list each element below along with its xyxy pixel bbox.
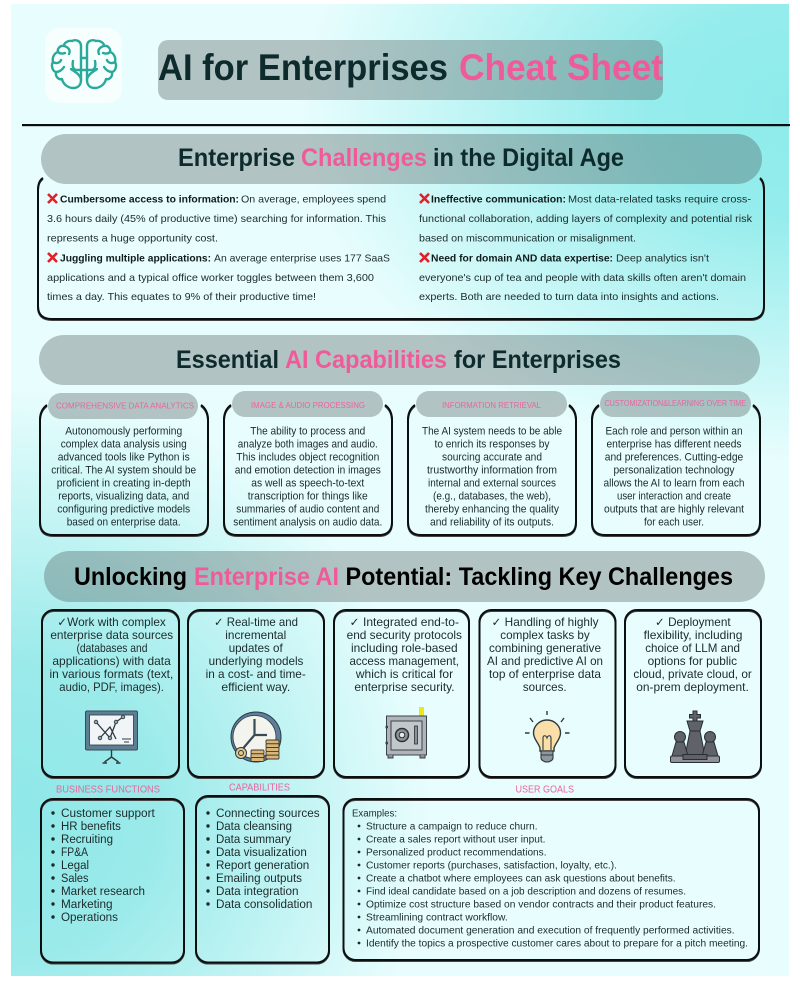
card: deployment flexibility: cloud, private cloud, or — [633, 668, 752, 681]
card: complex data sources: applications) with data — [52, 655, 171, 668]
card: complex tasks: AI and predictive AI on — [487, 655, 603, 668]
card: complex data sources: enterprise data sources — [50, 629, 173, 642]
panel: user goals: Structure a campaign to reduce churn. — [366, 822, 538, 832]
heading: essential AI capabilities: AI Capabilities — [285, 346, 447, 374]
card: real-time updates: incremental — [225, 629, 286, 642]
heading: enterprise challenges: in the Digital Age — [433, 144, 624, 172]
title: AI for Enterprises — [158, 47, 448, 88]
label: user goals: USER GOALS — [516, 784, 574, 796]
card: customization and learning over time: CUSTOMIZATION&LEARNING OVER TIME — [604, 398, 746, 408]
icon: presentation board — [86, 711, 138, 763]
text block: access and applications: times a day. This equates to 9% of their productive time! — [47, 292, 316, 303]
card: information retrieval: (e.g., databases, the web), — [433, 490, 551, 502]
card: image and audio processing: This includes object recognition — [236, 452, 379, 464]
card: customization and learning over time: personalization technology — [614, 464, 735, 476]
card: security protocols: including role-based — [351, 642, 458, 655]
card: deployment flexibility: on-prem deployment. — [636, 681, 749, 694]
card: image and audio processing: The ability to process and — [250, 426, 365, 438]
card: image and audio processing: as well as speech-to-text — [251, 478, 364, 490]
panel: business functions: HR benefits — [61, 819, 121, 833]
text block: communication and expertise: Deep analytics isn't — [616, 254, 709, 264]
card: complex tasks: top of enterprise data — [489, 668, 602, 681]
card: real-time updates: efficient way. — [221, 681, 290, 694]
panel: user goals: Streamlining contract workflow. — [366, 912, 508, 924]
card: security protocols: enterprise security. — [354, 681, 455, 694]
card: customization and learning over time — [592, 391, 760, 535]
text block: access and applications: 3.6 hours daily (45% of productive time) searching for information. This — [47, 214, 386, 225]
panel: capabilities: Data cleansing — [216, 819, 292, 833]
text block: communication and expertise: Most data-related tasks require cross- — [568, 194, 751, 206]
icon: clock and coins — [231, 712, 281, 762]
panel: user goals: Create a sales report without user input. — [366, 834, 546, 846]
icon: chess pieces — [670, 711, 720, 762]
card: comprehensive data analytics: proficient in creating in-depth — [57, 478, 191, 490]
title — [158, 40, 663, 100]
panel: enterprise challenges — [38, 134, 764, 319]
card: customization and learning over time: Each role and person within an — [606, 426, 742, 438]
card: information retrieval: and reliability of its outputs. — [430, 516, 554, 528]
icon: light bulb — [525, 711, 570, 762]
text block: access and applications: Juggling multiple applications: — [60, 254, 211, 264]
text block: access and applications: An average enterprise uses 177 SaaS — [214, 254, 390, 264]
card: comprehensive data analytics: COMPREHENSIVE DATA ANALYTICS — [56, 400, 194, 410]
card: complex tasks — [480, 610, 616, 777]
card: image and audio processing: summaries of audio content and — [236, 504, 379, 516]
card: complex tasks: complex tasks by — [500, 629, 590, 642]
card: information retrieval: The AI system needs to be able — [422, 426, 562, 438]
title: Cheat Sheet — [459, 47, 663, 88]
heading: essential AI capabilities — [39, 335, 760, 385]
text block: access and applications: Cumbersome access to information: — [60, 194, 239, 206]
card: information retrieval: to enrich its responses by — [434, 438, 550, 450]
card: information retrieval — [408, 391, 576, 535]
panel: user goals: Examples: — [352, 808, 397, 820]
panel: capabilities — [196, 796, 329, 962]
panel: capabilities: Data visualization — [216, 845, 307, 859]
card: customization and learning over time: user interaction and create — [617, 490, 731, 502]
card: real-time updates: ✓ Real-time and — [214, 616, 298, 629]
card: deployment flexibility: options for public — [648, 655, 737, 668]
panel: capabilities: Emailing outputs — [216, 871, 302, 885]
card: deployment flexibility: ✓ Deployment — [655, 616, 731, 629]
card: image and audio processing: transcription for things like — [248, 490, 368, 502]
panel: user goals: Personalized product recommendations. — [366, 848, 546, 858]
card: information retrieval: internal and external sources — [428, 478, 556, 490]
heading: essential AI capabilities: for Enterprises — [454, 346, 621, 374]
card: comprehensive data analytics: based on enterprise data. — [67, 516, 181, 528]
text block: communication and expertise: based on miscommunication or misalignment. — [419, 234, 636, 244]
panel: user goals: Optimize cost structure based on vendor contracts and their product features. — [366, 900, 716, 910]
card: customization and learning over time: enterprise has different needs — [606, 438, 742, 450]
label: business functions: BUSINESS FUNCTIONS — [56, 784, 160, 796]
text block: communication and expertise: Need for domain AND data expertise: — [431, 254, 613, 264]
card: comprehensive data analytics: critical. The AI system should be — [51, 464, 196, 476]
card: comprehensive data analytics: configuring predictive models — [57, 504, 191, 516]
text block: communication and expertise: Ineffective communication: — [431, 194, 566, 206]
card: deployment flexibility — [625, 610, 761, 777]
panel: capabilities: Report generation — [216, 858, 309, 872]
heading: unlocking enterprise AI potential: Enterprise AI — [194, 563, 339, 591]
heading: enterprise challenges: Challenges — [301, 144, 427, 172]
card: image and audio processing — [224, 391, 392, 535]
card: security protocols: access management, — [350, 655, 459, 668]
card: image and audio processing: analyze both images and audio. — [238, 438, 378, 450]
panel: business functions: Recruiting — [61, 832, 113, 846]
icon: brain logo — [45, 28, 122, 103]
card: information retrieval: trustworthy information from — [427, 464, 557, 476]
card: security protocols: ✓ Integrated end-to- — [350, 616, 459, 629]
text block: access and applications — [47, 194, 390, 303]
card: information retrieval: INFORMATION RETRIEVAL — [442, 400, 541, 410]
card: real-time updates: updates of — [229, 642, 283, 655]
heading: unlocking enterprise AI potential: Unlocking — [74, 563, 187, 591]
card: information retrieval: thereby enhancing the quality — [425, 504, 560, 516]
card: complex tasks: ✓ Handling of highly — [492, 616, 599, 629]
card: complex tasks: combining generative — [489, 642, 601, 655]
card: security protocols: end security protocols — [347, 629, 462, 642]
panel: business functions: Customer support — [61, 806, 155, 820]
panel: capabilities: Data summary — [216, 832, 291, 846]
panel: business functions: Sales — [61, 871, 88, 885]
panel: business functions — [41, 799, 184, 962]
panel: business functions: Marketing — [61, 897, 113, 911]
card: real-time updates: in a cost- and time- — [206, 668, 306, 681]
card: information retrieval: sourcing accurate and — [442, 452, 542, 464]
card: image and audio processing: sentiment analysis on audio data. — [233, 516, 382, 528]
card: security protocols — [334, 610, 469, 777]
panel: capabilities: Data consolidation — [216, 897, 312, 911]
card: image and audio processing: IMAGE & AUDIO PROCESSING — [251, 400, 365, 410]
panel: business functions: Operations — [61, 910, 118, 924]
card: complex tasks: sources. — [523, 681, 567, 694]
heading: unlocking enterprise AI potential — [44, 551, 765, 602]
text block: communication and expertise: experts. Both are needed to turn data into insights and actions. — [419, 292, 719, 303]
card: comprehensive data analytics: advanced tools like Python is — [58, 452, 190, 464]
heading: essential AI capabilities: Essential — [176, 346, 279, 374]
text block: communication and expertise: everyone's cup of tea and people with data skills often aren't domain — [419, 273, 746, 284]
text block: communication and expertise: functional collaboration, adding layers of complexity and potential risk — [419, 214, 753, 225]
card: security protocols: which is critical for — [355, 668, 453, 681]
card: customization and learning over time: allows the AI to learn from each — [604, 478, 744, 490]
card: customization and learning over time: outputs that are highly relevant — [604, 504, 744, 516]
card: complex data sources: in various formats (text, — [50, 668, 173, 681]
heading: enterprise challenges — [41, 134, 762, 184]
panel: user goals — [344, 799, 759, 960]
panel: user goals: Find ideal candidate based on a job description and dozens of resumes. — [366, 886, 686, 898]
card: customization and learning over time: for each user. — [644, 516, 704, 528]
card: complex data sources: audio, PDF, images). — [59, 681, 164, 694]
text block: access and applications: On average, employees spend — [241, 194, 386, 206]
panel: business functions: Market research — [61, 884, 145, 898]
heading: unlocking enterprise AI potential: Potential: Tackling Key Challenges — [346, 563, 733, 591]
card: real-time updates: underlying models — [209, 655, 304, 668]
card: deployment flexibility: flexibility, including — [644, 629, 742, 642]
text block: access and applications: applications and a typical office worker toggles between them 3,600 — [47, 273, 374, 284]
icon: safe — [386, 707, 426, 758]
card: customization and learning over time: and preferences. Cutting-edge — [605, 452, 743, 464]
label: capabilities: CAPABILITIES — [229, 782, 290, 794]
panel: user goals: Identify the topics a prospective customer cares about to prepare for a pitch meeting. — [366, 938, 748, 950]
text block: access and applications: represents a huge opportunity cost. — [47, 234, 218, 244]
text block: communication and expertise — [419, 194, 753, 303]
panel: capabilities: Data integration — [216, 884, 299, 898]
panel: user goals: Customer reports (purchases, satisfaction, loyalty, etc.). — [366, 860, 617, 872]
card: comprehensive data analytics: complex data analysis using — [61, 438, 187, 450]
panel: user goals: Automated document generation and execution of frequently performed activities. — [366, 926, 735, 936]
card: complex data sources — [42, 610, 179, 777]
panel: user goals: Create a chatbot where employees can ask questions about benefits. — [366, 874, 676, 884]
card: deployment flexibility: choice of LLM and — [645, 642, 740, 655]
panel: capabilities: Connecting sources — [216, 806, 320, 820]
card: complex data sources: ✓Work with complex — [57, 616, 166, 629]
heading: enterprise challenges: Enterprise — [178, 144, 295, 172]
card: complex data sources: (databases and — [76, 642, 148, 655]
card: comprehensive data analytics: reports, visualizing data, and — [58, 490, 189, 502]
panel: business functions: FP&A — [61, 845, 89, 859]
card: real-time updates — [188, 610, 324, 777]
card: comprehensive data analytics: Autonomously performing — [65, 426, 182, 438]
card: image and audio processing: and emotion detection in images — [235, 464, 381, 476]
card: comprehensive data analytics — [40, 393, 208, 535]
panel: business functions: Legal — [61, 858, 89, 872]
